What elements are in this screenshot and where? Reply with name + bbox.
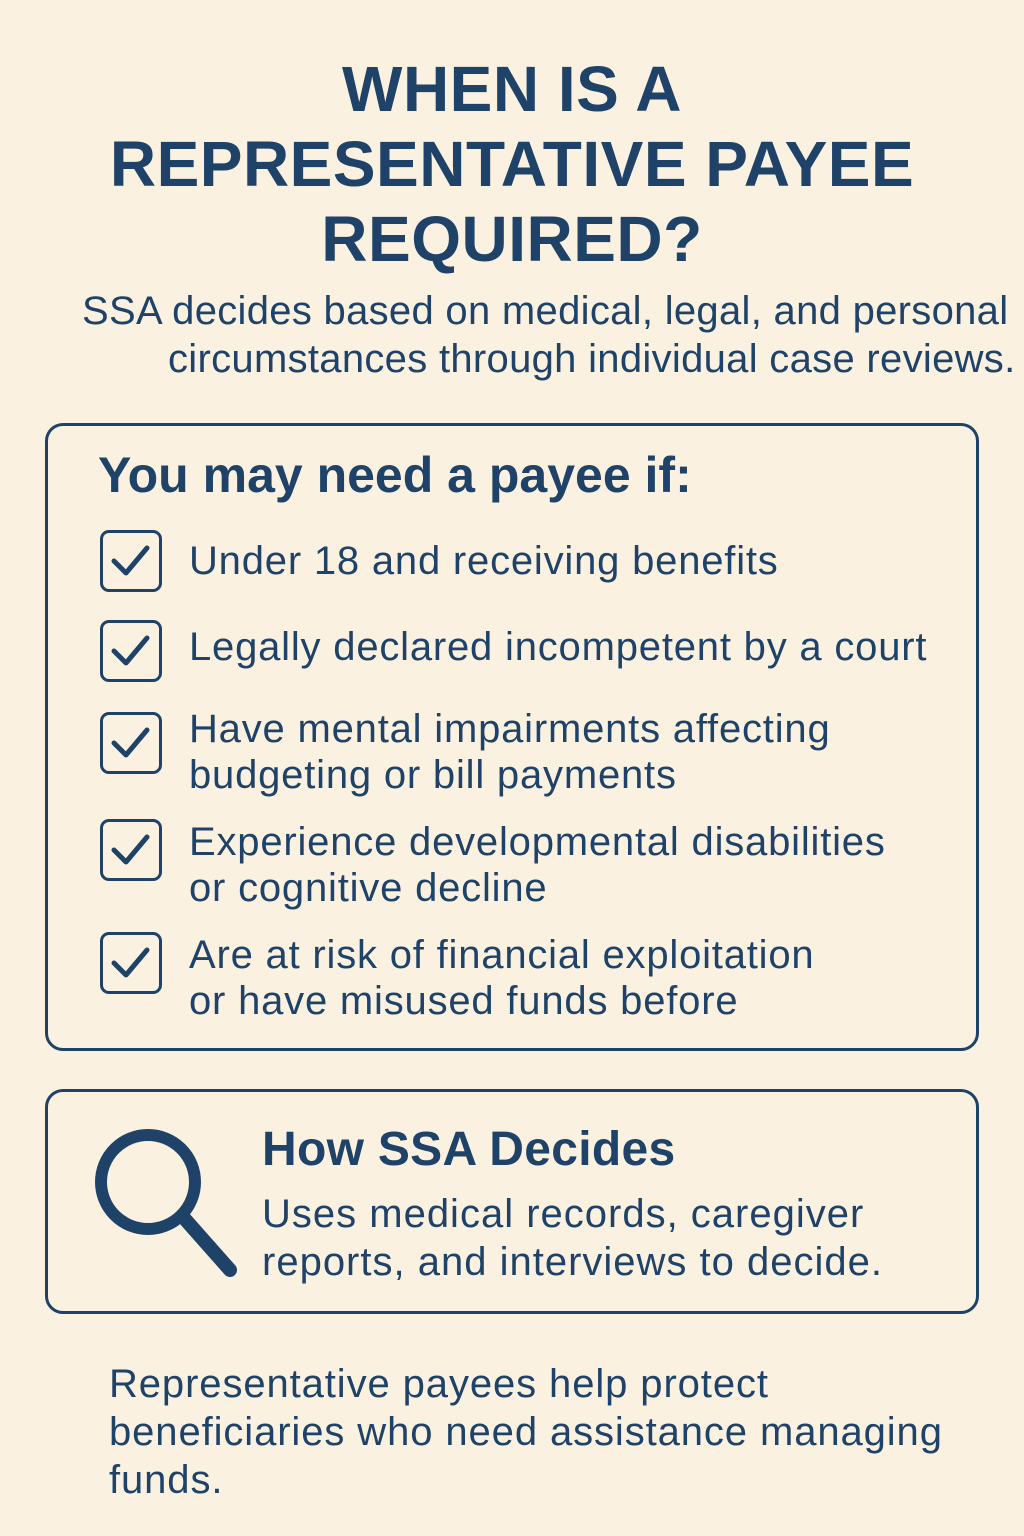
- checkbox item 3: Have mental impairments affecting: [189, 707, 830, 751]
- checkbox item 4: Experience developmental disabilities: [189, 820, 886, 864]
- footer text: beneficiaries who need assistance managing: [109, 1410, 943, 1454]
- checkbox item 5: Are at risk of financial exploitation: [189, 933, 814, 977]
- checkbox item 1: [100, 530, 779, 592]
- title: [110, 53, 914, 275]
- text: decision description: Uses medical records, caregiver: [262, 1192, 864, 1236]
- checkbox item 4: [100, 819, 886, 910]
- footer text: funds.: [109, 1458, 223, 1502]
- checkbox item 2: [100, 620, 927, 682]
- panel: how SSA decides: [45, 1089, 979, 1314]
- checkbox item 5: [100, 932, 814, 1023]
- title: WHEN IS A: [342, 53, 682, 125]
- checkbox item 3: budgeting or bill payments: [189, 753, 677, 797]
- panel: you may need a payee: [45, 423, 979, 1051]
- icon: magnifying glass: [95, 1129, 237, 1277]
- subtitle: SSA decides based on medical, legal, and personal: [82, 289, 1008, 333]
- title: REQUIRED?: [321, 203, 703, 275]
- text: decision description: [262, 1192, 883, 1284]
- footer text: [109, 1362, 943, 1502]
- heading: you may need a payee if: You may need a payee if:: [98, 447, 692, 503]
- checkbox item 4: or cognitive decline: [189, 866, 547, 910]
- checkbox item 1: Under 18 and receiving benefits: [189, 539, 779, 583]
- text: decision description: reports, and interviews to decide.: [262, 1240, 883, 1284]
- footer text: Representative payees help protect: [109, 1362, 769, 1406]
- checkbox item 3: [100, 707, 830, 797]
- title: REPRESENTATIVE PAYEE: [110, 128, 914, 200]
- subtitle: [82, 289, 1016, 381]
- checkbox item 2: Legally declared incompetent by a court: [189, 625, 927, 669]
- checkbox item 5: or have misused funds before: [189, 979, 738, 1023]
- heading: how SSA decides: How SSA Decides: [262, 1123, 676, 1176]
- subtitle: circumstances through individual case reviews.: [168, 337, 1016, 381]
